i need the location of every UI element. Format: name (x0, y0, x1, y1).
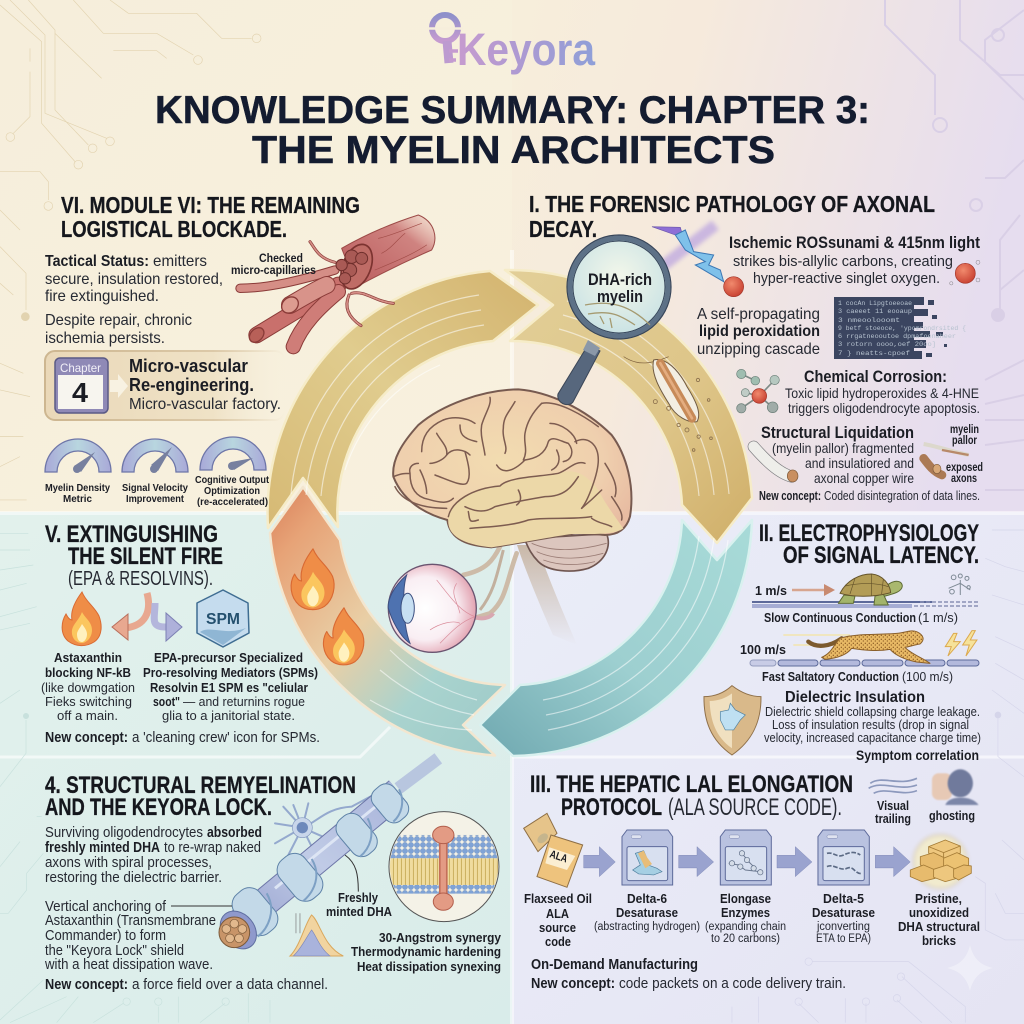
panel: I forensic pathology (529, 191, 983, 503)
slow conduction row: Slow Continuous Conduction (764, 610, 916, 625)
text: synergy labels (351, 930, 502, 974)
text: synergy labels: Thermodynamic hardening (351, 944, 501, 959)
code snippet disintegrating: 7 } neatts-cpoef (838, 350, 910, 357)
optic nerves (463, 547, 517, 618)
text: structural liquidation: and insulatiored and (805, 455, 914, 471)
code snippet disintegrating: 3 rotorn oooo,oef 20oo] (838, 341, 936, 348)
body text (44, 825, 262, 973)
text: new concept (45, 730, 320, 746)
icon: SPM hexagon: SPM (206, 611, 240, 628)
panel: 4 structural remyelination (44, 758, 502, 993)
heading: (EPA & RESOLVINS). (68, 568, 213, 590)
icon: flame (62, 592, 101, 646)
text: new concept: New concept: (45, 976, 128, 993)
code snippet disintegrating: 1 cocAn Lipgtoeeoae (838, 300, 912, 307)
leader line: vertical anchoring (171, 905, 232, 907)
text: EPA precursor: EPA-precursor Specialized (154, 650, 303, 665)
icon: SPM hexagon (197, 590, 249, 647)
body text: fire extinguished. (45, 288, 159, 305)
text: dielectric insulation: Dielectric Insulation (785, 689, 925, 706)
text: ischemic rossunami: Ischemic ROSsunami & 415nm light (729, 234, 980, 252)
central brain and eye (388, 389, 631, 652)
fast conduction row: (100 m/s) (902, 669, 953, 684)
code snippet disintegrating: 3 nmeoolooomt (838, 317, 900, 324)
body text: freshly minted DHA (45, 840, 160, 856)
text: lipid peroxidation (697, 306, 820, 358)
heading: PROTOCOL (561, 794, 662, 821)
step labels: flaxseed: ALA (546, 907, 569, 921)
code snippet disintegrating: 3 caeeet 11 eooaup (838, 308, 912, 315)
text: new concept (45, 976, 328, 993)
icon: eye (388, 564, 493, 652)
enzyme box: delta-6: (abstracting hydrogen) (594, 921, 700, 933)
text: EPA precursor: soot" (153, 694, 180, 709)
body text: emitters (153, 253, 207, 270)
enzyme box: delta-6: Delta-6 (627, 892, 667, 906)
text: astaxanthin (41, 650, 135, 723)
text: dielectric insulation: Loss of insulation results (drop in signal (772, 718, 969, 732)
text: new concept: New concept: (759, 489, 821, 503)
text: structural liquidation (761, 424, 914, 486)
slow axon line (752, 601, 980, 608)
icon: scattered signal (949, 574, 970, 595)
heading: (ALA SOURCE CODE). (668, 794, 842, 821)
text: astaxanthin: Fieks switching (45, 694, 132, 709)
label: myelin pallor and exposed axons (946, 424, 983, 485)
logo (427, 15, 596, 75)
text: dielectric insulation: Dielectric shield collapsing charge leakage. (765, 705, 980, 719)
icon: ring flame upper (291, 549, 334, 610)
enzyme box: elongase: Elongase (720, 892, 771, 906)
icon: DHA bricks: bricks (922, 934, 956, 948)
icon: ALA packets (524, 813, 583, 887)
icon: ghosting: ghosting (929, 809, 975, 823)
text: synergy labels: 30-Angstrom synergy (379, 930, 502, 945)
illustration: remyelinated axon (213, 758, 438, 956)
fast conduction row (740, 631, 979, 684)
inset: lipid bilayer (388, 812, 502, 922)
enzyme box: delta-5: Desaturase (812, 906, 875, 920)
step labels: flaxseed: Flaxseed Oil (524, 892, 592, 906)
text: on-demand manufacturing: On-Demand Manufacturing (531, 957, 698, 973)
enzyme box: elongase: (expanding chain (705, 921, 786, 933)
text: structural liquidation: (myelin pallor) fragmented (772, 440, 914, 456)
callout: chapter 4: Re-engineering. (129, 375, 254, 395)
logo wordmark: Keyora (457, 24, 596, 75)
label: checked micro-capillaries: Checked (259, 251, 303, 265)
label: myelin pallor and exposed axons: axons (951, 473, 977, 485)
code snippet disintegrating: 6 rrgatneooutoe dpmafoenaheer (838, 333, 956, 340)
body text: axons with spiral processes, (45, 855, 212, 871)
code snippet disintegrating: 9 betf stoeoce, 'ypomrondrsited { (838, 325, 966, 332)
gauge: myelin density: Myelin Density (45, 482, 110, 494)
body text: Despite repair, chronic (45, 312, 192, 329)
icon: chapter calendar: 4 (72, 377, 88, 408)
icon: cracked shield (704, 686, 761, 755)
illustration: micro-capillaries (240, 215, 435, 347)
illustration: lightning and oxygen (652, 225, 980, 297)
text: astaxanthin: off a main. (57, 708, 118, 723)
icon: ALA packets: ALA (548, 848, 569, 865)
icon: magnifying glass DHA-rich myelin: DHA-rich (588, 270, 652, 289)
arrow: gold right arc (505, 270, 752, 543)
heading: V. EXTINGUISHING (45, 521, 218, 548)
label: myelin pallor and exposed axons: exposed (946, 462, 983, 474)
icon: molecule (737, 369, 779, 413)
text: ischemic rossunami (729, 234, 980, 287)
label: checked micro-capillaries (231, 251, 316, 277)
chart: heat dissipation wave (290, 913, 343, 956)
body text: Astaxanthin (Transmembrane (45, 913, 216, 929)
icon: DHA bricks: unoxidized (909, 906, 969, 920)
icon: oligodendrocyte neuron (275, 795, 373, 855)
enzyme box: elongase (705, 830, 786, 945)
text: EPA precursor: — and returnins rogue (183, 694, 305, 709)
icon: cheetah (783, 631, 930, 663)
label: freshly minted DHA (326, 890, 393, 919)
text: lipid peroxidation: lipid peroxidation (699, 323, 820, 340)
icon: ghosting (929, 769, 979, 823)
code snippet disintegrating (834, 297, 966, 359)
text: EPA precursor: Pro-resolving Mediators (SPMs) (143, 665, 318, 680)
heading: VI. MODULE VI: THE REMAINING (61, 192, 360, 218)
title (155, 89, 870, 172)
text: new concept: New concept: (45, 730, 128, 746)
fast axon nodes (750, 660, 979, 666)
icon: stripped wires (754, 444, 969, 482)
arrow: slow (792, 584, 835, 596)
text: structural liquidation: axonal copper wire (814, 470, 914, 486)
text: lipid peroxidation: unzipping cascade (697, 341, 820, 358)
text: lipid peroxidation: A self-propagating (697, 306, 820, 323)
slow conduction row: (1 m/s) (918, 610, 958, 625)
title: THE MYELIN ARCHITECTS (252, 129, 775, 172)
text: chemical corrosion (785, 368, 980, 416)
icon: lightning bolts (945, 631, 977, 656)
gauge: cognitive output (195, 437, 269, 508)
heading: THE SILENT FIRE (68, 543, 223, 570)
body text: Commander) to form (45, 928, 166, 944)
cerebellum (525, 534, 608, 571)
gauge: myelin density (45, 439, 111, 505)
brainstem (517, 545, 577, 645)
label: checked micro-capillaries: micro-capillaries (231, 263, 316, 277)
icon: DHA bricks (898, 835, 980, 948)
fast conduction row: Fast Saltatory Conduction (762, 669, 899, 684)
text: dielectric insulation (764, 689, 981, 745)
enzyme box: elongase: Enzymes (721, 906, 770, 920)
heading: LOGISTICAL BLOCKADE. (61, 216, 287, 242)
body text: to re-wrap naked (164, 840, 261, 856)
enzyme box: delta-5 (812, 830, 875, 945)
heading: DECAY. (529, 216, 597, 242)
callout: chapter 4: Micro-vascular factory. (129, 396, 281, 413)
heading (529, 191, 935, 242)
gauge: cognitive output: (re-accelerated) (197, 496, 268, 508)
text: new concept: Coded disintegration of data lines. (824, 489, 980, 503)
enzyme box: elongase: to 20 carbons) (711, 933, 780, 945)
text: synergy labels: Heat dissipation synexing (357, 959, 501, 974)
text: on-demand manufacturing: New concept: (531, 975, 615, 992)
title: KNOWLEDGE SUMMARY: CHAPTER 3: (155, 89, 870, 132)
icon: visual trailing: trailing (875, 812, 911, 826)
arrow: gold left arc (268, 271, 538, 528)
text: chemical corrosion: Chemical Corrosion: (804, 368, 947, 386)
arrow: teal right arc (480, 520, 752, 756)
icon: magnifying glass DHA-rich myelin: myelin (597, 287, 643, 306)
body text: restoring the dielectric barrier. (45, 870, 222, 886)
text: new concept: a 'cleaning crew' icon for SPMs. (132, 730, 320, 746)
icon: magnifying glass DHA-rich myelin (558, 235, 671, 405)
label: freshly minted DHA: minted DHA (326, 904, 393, 919)
icon: DHA bricks: Pristine, (915, 892, 962, 906)
body text: with a heat dissipation wave. (44, 957, 213, 973)
heading: AND THE KEYORA LOCK. (45, 794, 272, 821)
enzyme box: delta-5: jconverting (816, 921, 870, 933)
gauge: cognitive output: Cognitive Output (195, 474, 269, 486)
pipeline arrows (584, 847, 910, 877)
panel: II electrophysiology (704, 520, 981, 763)
text: dielectric insulation: velocity, increased capacitance charge time) (764, 731, 981, 745)
step labels: flaxseed (524, 892, 592, 949)
text: new concept: a force field over a data channel. (132, 976, 328, 993)
body text: ischemia persists. (45, 330, 165, 347)
arrow: teal to orange left arc (270, 487, 505, 756)
icon: key (427, 15, 463, 63)
heading (61, 192, 360, 242)
cerebrum (393, 389, 631, 547)
text: symptom correlation: Symptom correlation (856, 747, 979, 763)
icon: visual trailing: Visual (877, 799, 909, 813)
heading (45, 521, 223, 590)
text: ischemic rossunami: hyper-reactive singlet oxygen. (753, 270, 940, 287)
icon: chapter calendar: Chapter (60, 361, 101, 375)
body text: the "Keyora Lock" shield (45, 943, 184, 959)
label: myelin pallor and exposed axons: myelin (950, 424, 979, 436)
step labels: flaxseed: code (545, 935, 571, 949)
enzyme box: delta-5: ETA to EPA) (816, 933, 871, 945)
text: chemical corrosion: Toxic lipid hydroperoxides & 4-HNE (785, 385, 979, 401)
callout: chapter 4: Micro-vascular (129, 356, 248, 376)
icon: turtle (838, 574, 902, 605)
text: on-demand manufacturing (531, 957, 846, 992)
panel: VI remaining logistical blockade (45, 192, 435, 508)
label: myelin pallor and exposed axons: pallor (952, 435, 977, 447)
icon: visual trailing (869, 778, 917, 826)
heading (530, 771, 853, 821)
gauge: signal velocity: Signal Velocity (122, 482, 188, 494)
text: EPA precursor: glia to a janitorial state. (162, 708, 295, 723)
panel: III hepatic elongation (524, 769, 980, 992)
slow conduction row (752, 574, 980, 625)
text: structural liquidation: Structural Liquidation (761, 424, 914, 442)
text: EPA precursor (143, 650, 318, 723)
body text: Surviving oligodendrocytes (45, 825, 203, 841)
text: on-demand manufacturing: code packets on a code delivery train. (619, 975, 846, 992)
heading: 4. STRUCTURAL REMYELINATION (45, 772, 356, 799)
text: astaxanthin: Astaxanthin (54, 650, 122, 665)
body text: absorbed (207, 825, 262, 841)
gauge: signal velocity: Improvement (126, 493, 184, 505)
callout: chapter 4 (45, 351, 285, 420)
arrows: swap between flame and SPM (112, 593, 182, 641)
central ring of arrows (268, 270, 752, 756)
gauge: cognitive output: Optimization (204, 485, 260, 497)
enzyme box: delta-5: Delta-5 (823, 892, 864, 906)
text: chemical corrosion: triggers oligodendrocyte apoptosis. (788, 400, 980, 416)
text: astaxanthin: blocking NF-kB (45, 665, 131, 680)
body text (45, 253, 223, 347)
icon: sparkle watermark (947, 945, 993, 991)
enzyme box: delta-6: Desaturase (616, 906, 678, 920)
heading: I. THE FORENSIC PATHOLOGY OF AXONAL (529, 191, 935, 217)
heading (45, 772, 356, 821)
gauge: signal velocity (122, 439, 188, 505)
panel: V extinguishing the silent fire (41, 521, 320, 746)
slow conduction row: 1 m/s (755, 583, 787, 598)
label: freshly minted DHA: Freshly (338, 890, 379, 905)
body text: Vertical anchoring of (45, 899, 167, 915)
enzyme box: delta-6 (594, 830, 700, 933)
heading (759, 520, 979, 569)
text: new concept (759, 489, 980, 503)
body text: Tactical Status: (45, 253, 149, 270)
text: ischemic rossunami: strikes bis-allylic carbons, creating (733, 253, 953, 270)
gauge: myelin density: Metric (63, 493, 92, 505)
text: astaxanthin: (like dowmgation (41, 680, 135, 695)
heading: III. THE HEPATIC LAL ELONGATION (530, 771, 853, 798)
icon: chapter calendar (55, 358, 108, 413)
icon: ring flame lower (323, 608, 364, 665)
illustration: degrading axon on ring (624, 357, 712, 451)
fast conduction row: 100 m/s (740, 642, 786, 657)
text: EPA precursor: Resolvin E1 SPM es "celiular (150, 680, 308, 695)
step labels: flaxseed: source (539, 921, 576, 935)
body text: secure, insulation restored, (45, 271, 223, 288)
icon: DHA bricks: DHA structural (898, 920, 980, 934)
